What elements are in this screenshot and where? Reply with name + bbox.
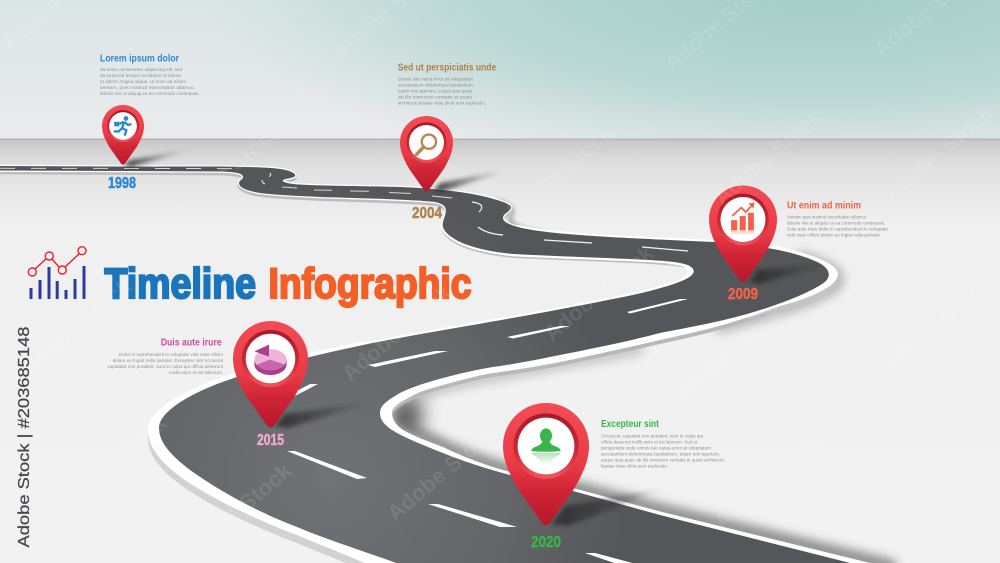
title: Infographic	[268, 260, 472, 308]
text block: Lorem ipsum dolor	[100, 54, 199, 97]
text block: Sed ut perspiciatis unde: Omnis iste natus error sit voluptatem	[398, 77, 473, 83]
text block: Lorem ipsum dolor: Lorem ipsum dolor	[100, 54, 179, 64]
watermark pattern: Adobe Stock	[167, 118, 287, 224]
text block: Ut enim ad minim: Ut enim ad minim	[787, 200, 861, 212]
road shadows	[392, 202, 890, 563]
text block: Excepteur sint: officia deserunt mollit anim id est laborum. Sed ut	[601, 439, 698, 445]
text block: Ut enim ad minim	[787, 200, 888, 238]
watermark pattern: Adobe Stock	[879, 100, 999, 206]
text block: Duis aute irure: Dolor in reprehenderit in voluptate velit esse cillum	[119, 352, 223, 358]
text block: Excepteur sint: beatae vitae dicta sunt explicabo.	[601, 463, 668, 469]
year 2009: 2009	[728, 286, 758, 303]
text block: Duis aute irure: dolore eu fugiat nulla pariatur. Excepteur sint occaecat	[113, 358, 224, 364]
text block: Ut enim ad minim: velit esse cillum dolore eu fugiat nulla pariatur.	[787, 232, 881, 238]
pin 2020	[503, 403, 589, 525]
text block: Lorem ipsum dolor: do eiusmod tempor incididunt ut labore	[100, 73, 181, 79]
watermark pattern: Adobe Stock	[877, 270, 997, 376]
watermark pattern: Adobe Stock	[669, 300, 789, 406]
text block: Lorem ipsum dolor: et dolore magna aliqua. Ut enim ad minim	[100, 79, 186, 85]
watermark pattern: Adobe Stock	[539, 240, 659, 346]
watermark pattern: Adobe Stock	[177, 458, 297, 563]
pin 2015	[233, 321, 308, 428]
text block: Excepteur sint: Occaecat cupidatat non proident, sunt in culpa qui	[601, 433, 703, 439]
year 2020: 2020	[531, 534, 561, 551]
text block: Excepteur sint: perspiciatis unde omnis iste natus error sit voluptatem	[601, 445, 711, 451]
background: sky	[0, 0, 1000, 140]
pin 2004	[400, 116, 453, 191]
watermark pattern: Adobe Stock	[859, 438, 979, 544]
watermark pattern: Adobe Stock	[337, 280, 457, 386]
text block: Ut enim ad minim: laboris nisi ut aliquip ex ea commodo consequat.	[787, 220, 885, 226]
text block: Duis aute irure: mollit anim id est laborum.	[169, 370, 223, 376]
text block: Sed ut perspiciatis unde: architecto beatae vitae dicta sunt explicabo.	[398, 101, 486, 107]
text block: Lorem ipsum dolor: veniam, quis nostrud exercitation ullamco	[100, 85, 194, 91]
text block: Ut enim ad minim: Duis aute irure dolor in reprehenderit in voluptate	[787, 226, 888, 232]
side credit text: Adobe Stock | #203685148	[16, 326, 33, 548]
text block: Duis aute irure: Duis aute irure	[161, 338, 222, 348]
text block: Excepteur sint	[601, 419, 724, 469]
year 1998: 1998	[108, 175, 136, 192]
watermark pattern: Adobe Stock	[709, 428, 829, 534]
road surface	[0, 166, 870, 563]
title: Timeline	[104, 260, 256, 308]
icon: pie chart	[254, 345, 287, 375]
watermark pattern: Adobe Stock	[499, 120, 619, 226]
watermark pattern: Adobe Stock	[52, 410, 172, 516]
text block: Excepteur sint: eaque ipsa quae ab illo inventore veritatis et quasi architecto	[601, 457, 724, 463]
pin 2009	[709, 186, 777, 282]
text block: Sed ut perspiciatis unde	[398, 62, 496, 107]
icon: line and bar chart	[28, 247, 86, 299]
watermark pattern: Adobe Stock	[382, 420, 502, 526]
text block: Sed ut perspiciatis unde: totam rem aperiam, eaque ipsa quae	[398, 89, 472, 95]
icon: growth chart	[731, 202, 755, 235]
text block: Ut enim ad minim: Veniam quis nostrud exercitation ullamco	[787, 214, 866, 220]
icon: magnifier	[416, 135, 436, 154]
road side edge	[0, 168, 870, 563]
text block: Excepteur sint: Excepteur sint	[601, 419, 659, 430]
text block: Sed ut perspiciatis unde: accusantium doloremque laudantium,	[398, 83, 474, 89]
text block: Sed ut perspiciatis unde: ab illo inventore veritatis et quasi	[398, 95, 472, 101]
text block: Lorem ipsum dolor: laboris nisi ut aliquip ex ea commodo consequat.	[100, 91, 199, 97]
icon: runner	[114, 116, 131, 136]
background: ground	[0, 138, 1000, 563]
icon: person	[531, 428, 561, 465]
pin shadows	[124, 150, 830, 526]
title	[104, 260, 472, 308]
road white border	[0, 166, 870, 563]
watermark pattern: Adobe Stock	[709, 104, 829, 210]
year 2015: 2015	[257, 432, 284, 449]
text block: Sed ut perspiciatis unde: Sed ut perspiciatis unde	[398, 62, 496, 74]
road centre dashes	[0, 168, 688, 251]
text block: Excepteur sint: accusantium doloremque laudantium, totam rem aperiam,	[601, 451, 720, 457]
road	[0, 166, 870, 563]
pin 1998	[102, 105, 144, 165]
watermark pattern: Adobe Stock	[17, 273, 137, 379]
text block: Duis aute irure: cupidatat non proident, sunt in culpa qui officia deserunt	[107, 364, 224, 370]
year 2004: 2004	[412, 205, 442, 222]
text block: Lorem ipsum dolor: Sit amet, consectetur adipiscing elit, sed	[100, 67, 182, 73]
text block: Duis aute irure	[107, 338, 224, 376]
